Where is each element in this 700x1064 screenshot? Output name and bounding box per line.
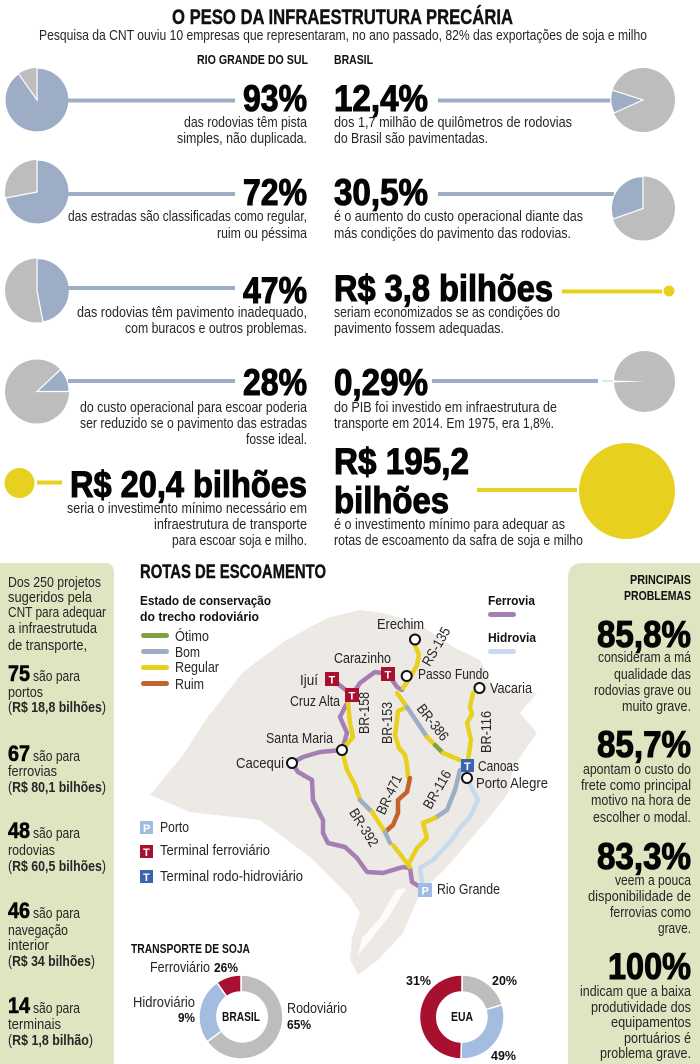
item: navegação interior: navegação <box>8 923 68 939</box>
description: más condições do pavimento das rodovias. <box>334 226 571 242</box>
description <box>334 115 572 147</box>
connector line <box>68 192 235 196</box>
pie chart 30,5% <box>611 176 675 240</box>
BR-116 north road <box>467 693 473 760</box>
hidrovia route <box>420 765 478 883</box>
item: terminais: terminais <box>8 1017 61 1033</box>
item: rodovias <box>8 818 106 875</box>
stat: 30,5% <box>334 172 675 242</box>
label: Ferroviário: 26% <box>214 960 238 975</box>
legend item: Terminal ferroviário: T <box>143 847 150 859</box>
item: 85,8%: muito grave. <box>622 699 691 715</box>
item: rodovias: rodovias <box>8 843 55 859</box>
description <box>67 501 307 549</box>
value <box>334 441 469 521</box>
column heading: Brasil: BRASIL <box>334 52 373 67</box>
legend: Hidrovia <box>488 630 537 654</box>
intro text: CNT para adequar <box>8 605 106 621</box>
donut chart: Brasil <box>133 960 347 1059</box>
map labels: BR-158 <box>357 692 373 734</box>
legend item: Terminal rodo-hidroviário: Terminal rodo-hidroviário <box>160 869 303 885</box>
BR-392 road <box>342 750 410 867</box>
stat: R$ 20,4 bilhões <box>4 464 307 549</box>
label: 31%: 31% <box>406 973 431 988</box>
item: 85,7% <box>581 724 691 826</box>
center label: EUA <box>451 1009 473 1024</box>
label: Rodoviário: 65% <box>287 1017 311 1032</box>
donut chart: EUA <box>406 973 517 1063</box>
map labels: Cacequi <box>236 756 284 772</box>
map labels: Passo Fundo <box>418 667 489 683</box>
map labels: Cruz Alta <box>290 694 340 710</box>
port: Rio Grande <box>418 883 432 898</box>
item: portos: 75 <box>8 661 30 686</box>
pie chart 47% <box>5 258 69 322</box>
description: do Brasil são pavimentadas. <box>334 131 488 147</box>
item: ferrovias <box>8 741 106 796</box>
label: Rodoviário: Rodoviário <box>287 1001 347 1017</box>
item: 100%: equipamentos <box>611 1015 691 1031</box>
stat: 72% <box>5 160 307 242</box>
description: do PIB foi investido em infraestrutura de <box>334 400 557 416</box>
label: Ferroviário: Ferroviário <box>150 960 210 976</box>
connector line <box>68 98 235 102</box>
terminal: Canoas: T <box>464 761 471 773</box>
intro text: a infraestrutuda <box>8 621 97 637</box>
item: portos: são para <box>33 669 80 685</box>
city markers <box>287 634 484 783</box>
terminal: Carazinho <box>381 667 395 682</box>
terminal: Cruz Alta <box>345 688 359 702</box>
description: das rodovias têm pista <box>184 115 307 131</box>
intro text: de transporte, <box>8 638 87 654</box>
map labels: BR-153 <box>380 702 396 744</box>
legend: Hidrovia: Hidrovia <box>488 630 537 645</box>
panel: principais problemas <box>568 563 700 1064</box>
legend item: Porto <box>140 820 189 836</box>
terminal: Carazinho: T <box>384 670 392 682</box>
value: 28% <box>243 362 307 403</box>
item: portos <box>8 661 106 716</box>
connector line <box>562 290 662 294</box>
title: O PESO DA INFRAESTRUTURA PRECÁRIA <box>172 6 513 29</box>
large yellow circle <box>579 443 675 539</box>
panel background <box>0 563 114 1064</box>
legend title <box>140 593 271 624</box>
description <box>334 517 583 549</box>
description: com buracos e outros problemas. <box>125 321 307 337</box>
item: ferrovias: ferrovias <box>8 764 57 780</box>
description: é o investimento mínimo para adequar as <box>334 517 565 533</box>
item: terminais <box>8 993 93 1049</box>
description: do custo operacional para escoar poderia <box>80 400 307 416</box>
stat: 47% <box>5 258 307 337</box>
legend item: Terminal rodo-hidroviário: T <box>143 872 150 884</box>
item: rodovias: são para <box>33 826 80 842</box>
donut segments <box>419 975 504 1059</box>
terminal: Ijuí: T <box>328 674 336 686</box>
item: portos: portos <box>8 685 43 701</box>
map labels: BR-116 <box>479 711 495 753</box>
terminal: Cruz Alta: T <box>348 690 356 702</box>
map labels: Santa Maria <box>266 731 333 747</box>
BR-471 road <box>385 778 410 832</box>
item: 83,3% <box>588 836 691 937</box>
description: rotas de escoamento da safra de soja e milho <box>334 533 583 549</box>
item: terminais: 14 <box>8 993 31 1018</box>
connector line <box>438 192 614 196</box>
donut segments <box>199 975 283 1059</box>
description <box>334 209 583 242</box>
description: é o aumento do custo operacional diante das <box>334 209 583 225</box>
item: 83,3%: 83,3% <box>597 836 691 877</box>
map labels: Vacaria <box>490 681 532 697</box>
label: 49%: 49% <box>491 1048 516 1063</box>
description: seria o investimento mínimo necessário em <box>67 501 307 517</box>
item: rodovias: (R$ 60,5 bilhões) <box>8 859 106 875</box>
map labels: Carazinho <box>334 651 391 667</box>
description <box>68 209 307 242</box>
item: 100% <box>580 946 691 1062</box>
description: simples, não duplicada. <box>177 131 307 147</box>
map labels: Ijuí <box>300 673 318 689</box>
connector line <box>432 379 614 383</box>
item: 100%: portuários é <box>624 1031 691 1047</box>
value: R$ 195,2 <box>334 441 469 482</box>
state shape <box>150 610 537 975</box>
legend item: Bom: Bom <box>175 645 200 661</box>
item: rodovias: 48 <box>8 818 30 843</box>
connector line <box>477 488 577 492</box>
item: navegação interior <box>8 898 95 970</box>
BR-386 road <box>407 707 460 760</box>
connector line <box>68 286 235 290</box>
description: fosse ideal. <box>246 432 307 448</box>
map: Rio Grande do Sul <box>150 610 537 975</box>
item: terminais: são para <box>33 1001 80 1017</box>
stat: 28% <box>5 360 307 448</box>
value: 12,4% <box>334 78 428 119</box>
pie chart 28% <box>5 360 69 424</box>
item: 100%: 100% <box>608 946 691 987</box>
description: ruim ou péssima <box>217 226 307 242</box>
heading: Rotas de escoamento: ROTAS DE ESCOAMENTO <box>140 562 326 583</box>
item: navegação interior: interior <box>8 938 49 954</box>
value: R$ 20,4 bilhões <box>70 464 307 505</box>
description: para escoar soja e milho. <box>172 533 307 549</box>
item: 85,8% <box>594 614 691 715</box>
legend: Ferrovia <box>488 593 536 617</box>
center label: BRASIL <box>222 1009 260 1024</box>
value: 47% <box>243 270 307 311</box>
item: ferrovias: são para <box>33 749 80 765</box>
description: pavimento fossem adequadas. <box>334 321 504 337</box>
item: ferrovias: (R$ 80,1 bilhões) <box>8 780 106 796</box>
description: ser reduzido se o pavimento das estradas <box>80 416 307 432</box>
pie chart 72% <box>5 160 69 224</box>
stat: 0,29% <box>334 351 675 432</box>
stat: 93% <box>5 68 307 147</box>
description: das estradas são classificadas como regular, <box>68 209 307 225</box>
item: navegação interior: (R$ 34 bilhões) <box>8 954 95 970</box>
map labels: BR-116 <box>420 768 455 812</box>
description <box>334 305 560 337</box>
item: 83,3%: grave. <box>658 921 691 937</box>
item: ferrovias: 67 <box>8 741 30 766</box>
legend title: Estado de conservação <box>140 593 271 608</box>
yellow dot <box>664 286 674 296</box>
intro text: Dos 250 projetos <box>8 575 101 591</box>
value: bilhões <box>334 480 449 521</box>
label: 20%: 20% <box>492 973 517 988</box>
description: dos 1,7 milhão de quilômetros de rodovias <box>334 115 572 131</box>
item: navegação interior: 46 <box>8 898 30 923</box>
yellow circle <box>4 468 34 498</box>
panel background <box>568 563 700 1064</box>
connector line <box>68 379 235 383</box>
map labels: Porto Alegre <box>476 776 548 792</box>
legend item: Regular: Regular <box>175 660 219 676</box>
description: seriam economizados se as condições do <box>334 305 560 321</box>
map labels: Canoas <box>478 759 519 775</box>
column heading: Rio Grande do Sul: RIO GRANDE DO SUL <box>197 52 308 67</box>
legend: road condition <box>140 593 271 693</box>
legend item: Terminal ferroviário: Terminal ferroviário <box>160 843 270 859</box>
value: 30,5% <box>334 172 428 213</box>
item: terminais: (R$ 1,8 bilhão) <box>8 1033 93 1049</box>
BR-158 road <box>342 703 353 750</box>
item: navegação interior: são para <box>33 906 80 922</box>
stat: R$ 3,8 bilhões <box>334 268 674 337</box>
item: 85,8%: 85,8% <box>597 614 691 655</box>
map labels: Rio Grande <box>437 882 500 898</box>
map labels <box>236 617 548 898</box>
legend item: Ótimo: Ótimo <box>175 628 209 645</box>
description: das rodovias têm pavimento inadequado, <box>77 305 307 321</box>
map labels: BR-392 <box>345 806 381 850</box>
value: 0,29% <box>334 362 428 403</box>
map routes <box>292 645 478 887</box>
value: 93% <box>243 78 307 119</box>
heading: Transporte de soja: TRANSPORTE DE SOJA <box>131 941 250 956</box>
terminal: Canoas <box>461 759 474 773</box>
connector line <box>37 480 62 484</box>
description <box>177 115 307 147</box>
label: Rodoviário <box>287 1001 347 1032</box>
legend title: do trecho rodoviário <box>140 609 259 624</box>
description: infraestrutura de transporte <box>154 517 307 533</box>
legend: Ferrovia: Ferrovia <box>488 593 536 608</box>
map labels: Erechim <box>377 617 424 633</box>
lagoon <box>358 888 406 955</box>
label: Hidroviário: Hidroviário <box>133 995 195 1011</box>
panel: projetos sugeridos <box>0 563 114 1064</box>
legend item: Porto: P <box>143 823 150 835</box>
pie chart 93% <box>5 68 69 132</box>
item: 85,7%: 85,7% <box>597 724 691 765</box>
item: 83,3%: disponibilidade de <box>588 889 691 905</box>
RS-135 and BR-153 roads <box>395 645 419 777</box>
terminal icons on map <box>325 667 474 898</box>
connector line <box>438 98 612 102</box>
map labels: BR-386 <box>413 701 451 744</box>
panel heading <box>624 572 691 603</box>
description <box>334 400 557 432</box>
terminal: Ijuí <box>325 672 339 686</box>
description: transporte em 2014. Em 1975, era 1,8%. <box>334 416 554 432</box>
port: Rio Grande: P <box>422 886 429 898</box>
pie chart 0,29% <box>613 351 675 412</box>
stat: R$ 195,2 bilhões <box>334 441 675 549</box>
legend item: Porto: Porto <box>160 820 189 836</box>
ferrovia routes <box>292 672 420 887</box>
description <box>80 400 307 448</box>
legend item: Ruim: Ruim <box>175 677 204 693</box>
pie chart 12,4% <box>611 68 675 132</box>
label: Hidroviário: 9% <box>178 1010 195 1025</box>
value: 72% <box>243 172 307 213</box>
map labels: RS-135 <box>419 625 454 669</box>
stat: 12,4% <box>334 68 675 147</box>
description <box>77 305 307 337</box>
label: Hidroviário <box>133 995 195 1025</box>
map labels: BR-471 <box>374 772 406 817</box>
BR-116 south road <box>408 770 460 865</box>
value: R$ 3,8 bilhões <box>334 268 553 309</box>
item: portos: (R$ 18,8 bilhões) <box>8 700 106 716</box>
intro text: sugeridos pela <box>8 590 92 606</box>
intro text <box>8 575 106 654</box>
legend: terminals <box>140 820 303 885</box>
